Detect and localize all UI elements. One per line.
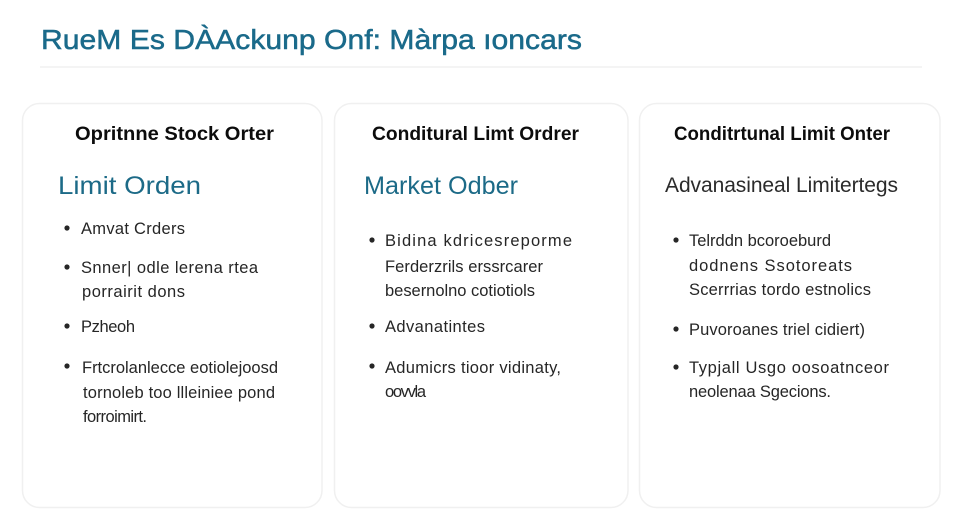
panel: right card [640, 104, 940, 508]
subheading: limit order: Limit Orden [58, 172, 201, 200]
bullet list: middle card [369, 232, 572, 401]
subheading: advanced: Advanasineal Limitertegs [665, 174, 898, 197]
bullet list: middle card: Advanatintes [385, 318, 485, 336]
bullet list: left card: porrairit dons [82, 283, 185, 301]
bullet list: left card: Pzheoh [81, 318, 135, 336]
bullet list: right card: Scerrrias tordo estnolics [689, 281, 871, 299]
title: RueM Es DÀAckunp Onf: Màrpa ıoncars [41, 24, 582, 55]
bullet list: left card: Frtcrolanlecce eotiolejoosd [82, 359, 278, 377]
card heading: right: Conditrtunal Limit Onter [674, 124, 891, 145]
bullet list: left card: Snner| odle lerena rtea [81, 259, 259, 277]
bullet list: right card: neolenaa Sgecions. [689, 383, 831, 401]
bullet list: right card: Puvoroanes triel cidiert) [689, 321, 865, 339]
bullet list: right card: dodnens Ssotoreats [689, 257, 852, 275]
bullet list: middle card: Bidina kdricesreporme [385, 232, 572, 250]
panel: middle card [334, 104, 628, 508]
bullet list: right card [673, 232, 890, 401]
bullet list: left card [64, 220, 278, 426]
bullet list: right card: Typjall Usgo oosoatnceor [689, 359, 890, 377]
bullet list: left card: Amvat Crders [81, 220, 185, 238]
bullet list: right card: Telrddn bcoroeburd [689, 232, 831, 250]
bullet list: middle card: oovvla [385, 383, 427, 401]
subheading: market order: Market Odber [364, 172, 518, 200]
bullet list: middle card: besernolno cotiotiols [385, 282, 535, 300]
bullet list: left card: forroimirt. [83, 408, 147, 426]
panel: left card [22, 104, 322, 508]
bullet list: middle card: Adumicrs tioor vidinaty, [385, 359, 561, 377]
bullet list: middle card: Ferderzrils erssrcarer [385, 258, 544, 276]
bullet list: left card: tornoleb too llleiniee pond [83, 384, 275, 402]
card heading: middle: Conditural Limt Ordrer [372, 124, 580, 145]
card heading: left: Opritnne Stock Orter [75, 124, 275, 145]
